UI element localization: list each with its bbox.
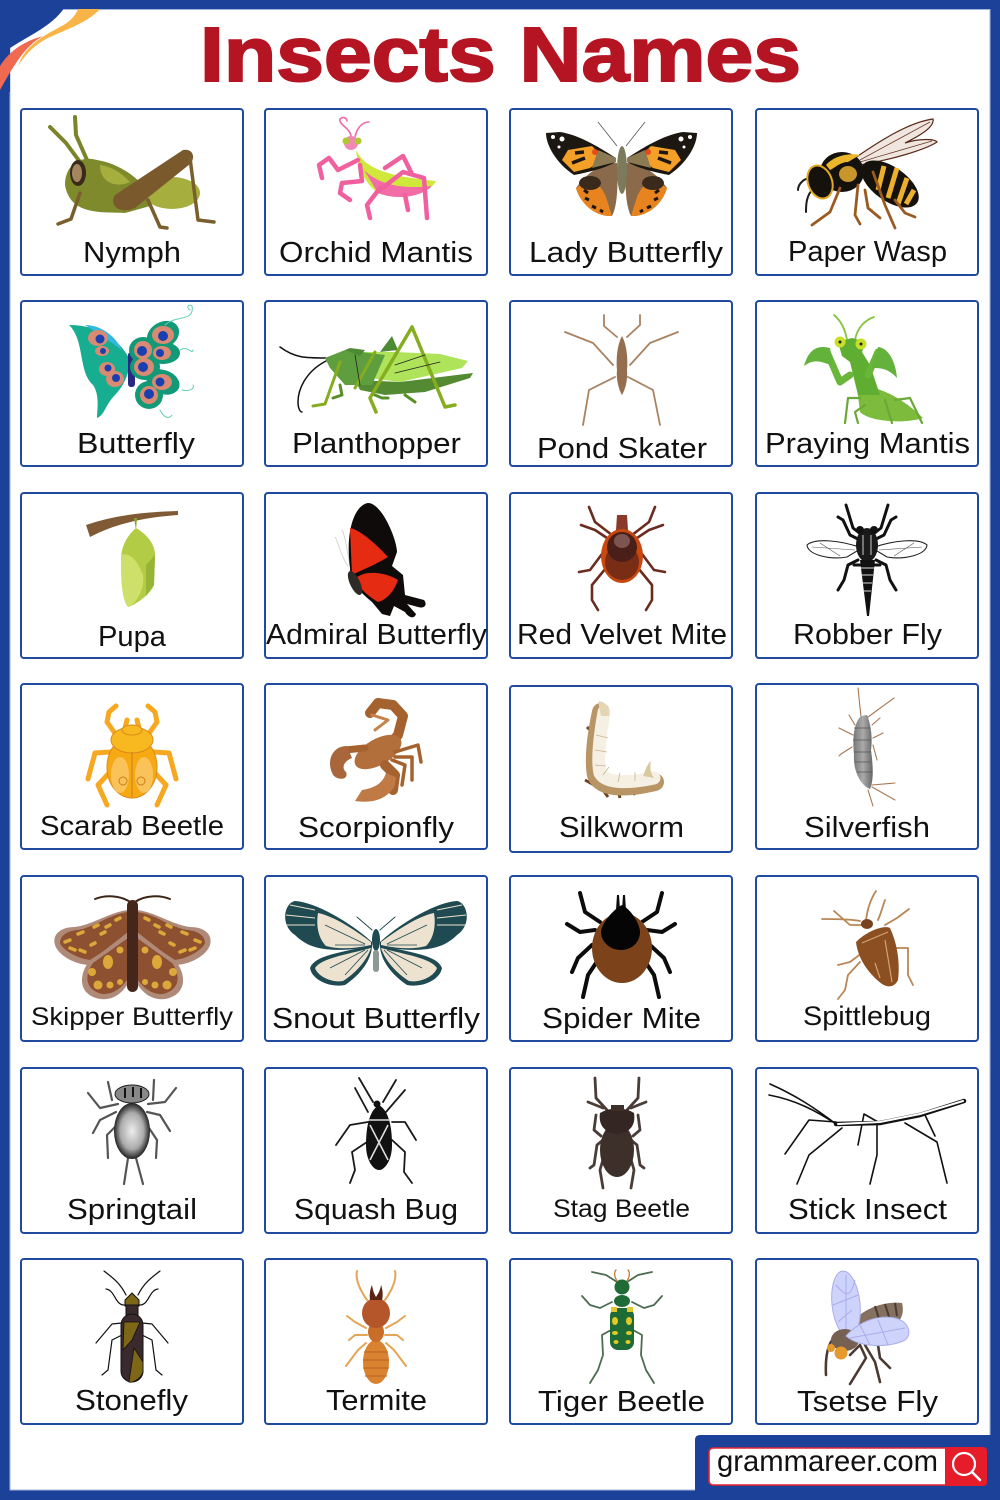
- panel: Silverfish: [756, 684, 978, 849]
- panel: Orchid Mantis: [265, 109, 487, 275]
- panel: Tsetse Fly: [756, 1259, 978, 1424]
- label: Admiral Butterfly: [266, 619, 488, 651]
- label: Spider Mite: [542, 1003, 701, 1035]
- panel: Praying Mantis: [756, 301, 978, 466]
- panel: Snout Butterfly: [265, 876, 487, 1041]
- title: Insects Names: [200, 12, 801, 98]
- label: Praying Mantis: [765, 428, 970, 460]
- label: Stick Insect: [788, 1194, 947, 1226]
- icon: stag beetle: [588, 1078, 646, 1188]
- panel: Spider Mite: [510, 876, 732, 1041]
- icon: scorpion: [330, 703, 421, 802]
- label: Orchid Mantis: [279, 237, 473, 269]
- icon: skipper butterfly: [54, 896, 211, 999]
- label: Springtail: [67, 1194, 197, 1226]
- label: Tiger Beetle: [538, 1386, 705, 1418]
- panel: Scorpionfly: [265, 684, 487, 849]
- panel: Robber Fly: [756, 493, 978, 658]
- icon: spider mite: [567, 893, 675, 997]
- panel: Squash Bug: [265, 1068, 487, 1233]
- icon: termite: [346, 1271, 406, 1384]
- panel: Stick Insect: [756, 1068, 978, 1233]
- icon: stick insect: [769, 1084, 964, 1184]
- icon: snout butterfly: [285, 901, 467, 986]
- panel: Silkworm: [510, 686, 732, 852]
- panel: Skipper Butterfly: [21, 876, 243, 1041]
- panel: Stag Beetle: [510, 1068, 732, 1233]
- panel: Admiral Butterfly: [265, 493, 488, 658]
- label: Planthopper: [292, 428, 461, 460]
- footer: website search bar: [695, 1435, 1000, 1500]
- panel: Springtail: [21, 1068, 243, 1233]
- icon: robber fly: [807, 505, 927, 616]
- icon: admiral butterfly: [335, 503, 426, 617]
- label: Pupa: [98, 621, 167, 653]
- label: Robber Fly: [793, 619, 943, 651]
- panel: Planthopper: [265, 301, 487, 466]
- icon: stonefly: [96, 1271, 168, 1382]
- corner swoosh decoration: [0, 0, 100, 92]
- icon: painted lady butterfly: [546, 122, 697, 216]
- icon: tsetse fly: [826, 1270, 909, 1384]
- panel: Stonefly: [21, 1259, 243, 1424]
- panel: Lady Butterfly: [510, 109, 732, 275]
- label: Scorpionfly: [298, 812, 455, 844]
- label: Scarab Beetle: [40, 810, 224, 841]
- label: Pond Skater: [537, 433, 707, 465]
- panel: Pond Skater: [510, 301, 732, 466]
- panel: Termite: [265, 1259, 487, 1424]
- icon: silkworm: [585, 701, 657, 798]
- icon: orchid mantis: [319, 118, 436, 218]
- icon: pond skater: [565, 315, 678, 425]
- label: Silkworm: [559, 812, 684, 844]
- icon: paper wasp: [798, 119, 937, 228]
- label: Silverfish: [804, 812, 930, 844]
- label: Paper Wasp: [788, 236, 947, 268]
- panel: Tiger Beetle: [510, 1259, 732, 1424]
- website text: grammareer.com: [717, 1445, 938, 1478]
- label: Butterfly: [77, 428, 196, 460]
- panel: Scarab Beetle: [21, 684, 243, 849]
- label: Squash Bug: [294, 1194, 458, 1226]
- label: Snout Butterfly: [272, 1003, 481, 1035]
- panel: Red Velvet Mite: [510, 493, 732, 658]
- label: Red Velvet Mite: [517, 619, 727, 651]
- icon: silverfish: [839, 688, 895, 806]
- panel: Nymph: [21, 109, 243, 275]
- icon: tiger beetle: [582, 1270, 662, 1383]
- panel: Spittlebug: [756, 876, 978, 1041]
- icon: magnifier: [945, 1447, 987, 1486]
- panel: Butterfly: [21, 301, 243, 466]
- label: Stag Beetle: [553, 1195, 690, 1223]
- icon: peacock butterfly: [69, 305, 193, 418]
- panel: Paper Wasp: [756, 109, 978, 275]
- label: Nymph: [83, 237, 181, 269]
- icon: planthopper: [280, 327, 473, 412]
- icon: scarab beetle: [88, 706, 176, 805]
- label: Termite: [326, 1385, 427, 1417]
- icon: nymph grasshopper: [50, 117, 214, 228]
- icon: springtail: [88, 1080, 176, 1184]
- icon: red velvet mite: [579, 507, 665, 610]
- label: Tsetse Fly: [797, 1386, 939, 1418]
- panel: Pupa: [21, 493, 243, 658]
- icon: spittlebug: [822, 891, 913, 999]
- label: Spittlebug: [803, 1001, 931, 1031]
- label: Lady Butterfly: [529, 237, 724, 269]
- label: Skipper Butterfly: [31, 1003, 234, 1031]
- icon: praying mantis: [804, 315, 923, 423]
- icon: squash bug: [336, 1078, 416, 1183]
- icon: chrysalis on twig: [86, 511, 178, 607]
- label: Stonefly: [75, 1385, 189, 1417]
